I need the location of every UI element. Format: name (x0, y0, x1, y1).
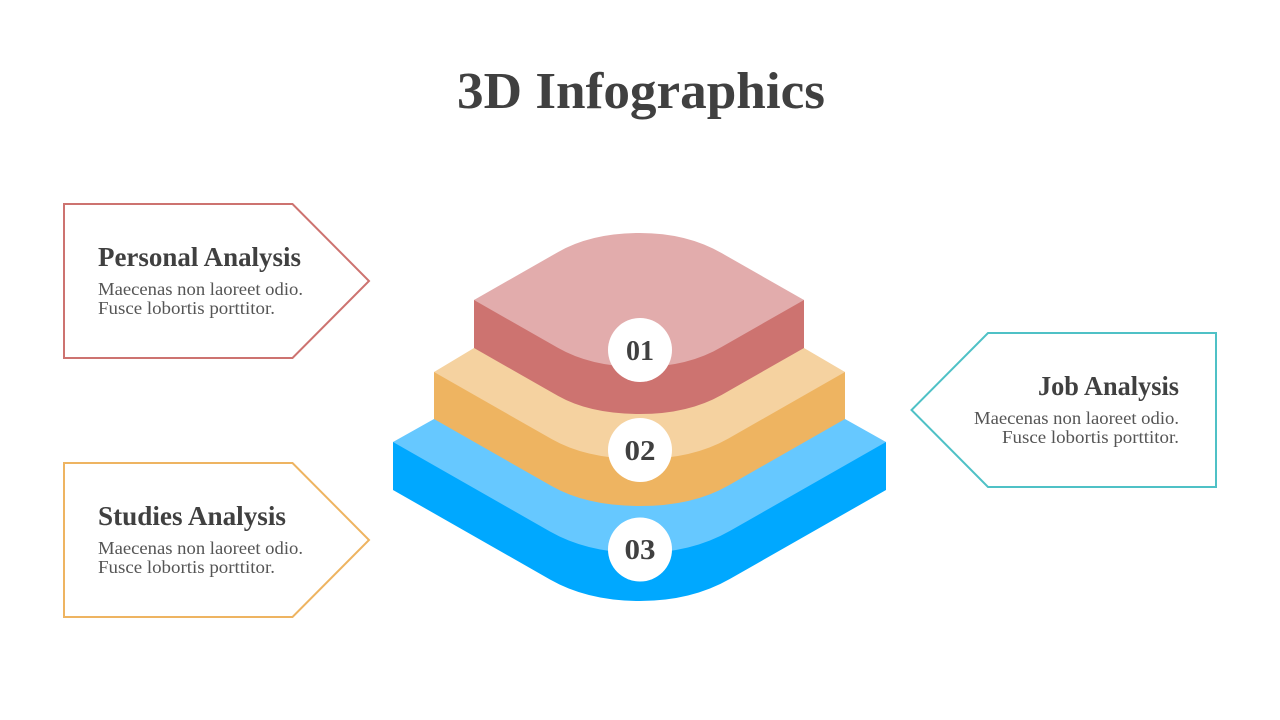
badge 02 (608, 418, 672, 482)
badge 01 (608, 318, 672, 382)
panel: studies analysis (64, 463, 369, 617)
heading: job analysis: Job Analysis (1038, 371, 1179, 401)
badge 02: 02 (624, 435, 656, 467)
text block: job analysis: Fusce lobortis porttitor. (1002, 427, 1179, 447)
text block: personal analysis: Maecenas non laoreet odio. (98, 279, 303, 299)
panel: personal analysis (64, 204, 369, 358)
text block: job analysis (974, 408, 1179, 447)
badge 01: 01 (626, 335, 654, 367)
layered pyramid chart (393, 233, 886, 601)
heading: studies analysis: Studies Analysis (98, 501, 286, 531)
badge 03: 03 (624, 534, 656, 566)
layer 2: orange (434, 330, 845, 506)
layer 3: blue (393, 400, 886, 601)
text block: personal analysis: Fusce lobortis porttitor. (98, 298, 275, 318)
panel: job analysis (912, 333, 1216, 487)
text block: job analysis: Maecenas non laoreet odio. (974, 408, 1179, 428)
text block: studies analysis: Fusce lobortis porttitor. (98, 557, 275, 577)
title: 3D Infographics (457, 63, 825, 120)
text block: studies analysis (98, 538, 303, 577)
heading: personal analysis: Personal Analysis (98, 242, 301, 272)
text block: studies analysis: Maecenas non laoreet odio. (98, 538, 303, 558)
badge 03 (608, 518, 672, 582)
layer 1: red (474, 233, 804, 414)
text block: personal analysis (98, 279, 303, 318)
